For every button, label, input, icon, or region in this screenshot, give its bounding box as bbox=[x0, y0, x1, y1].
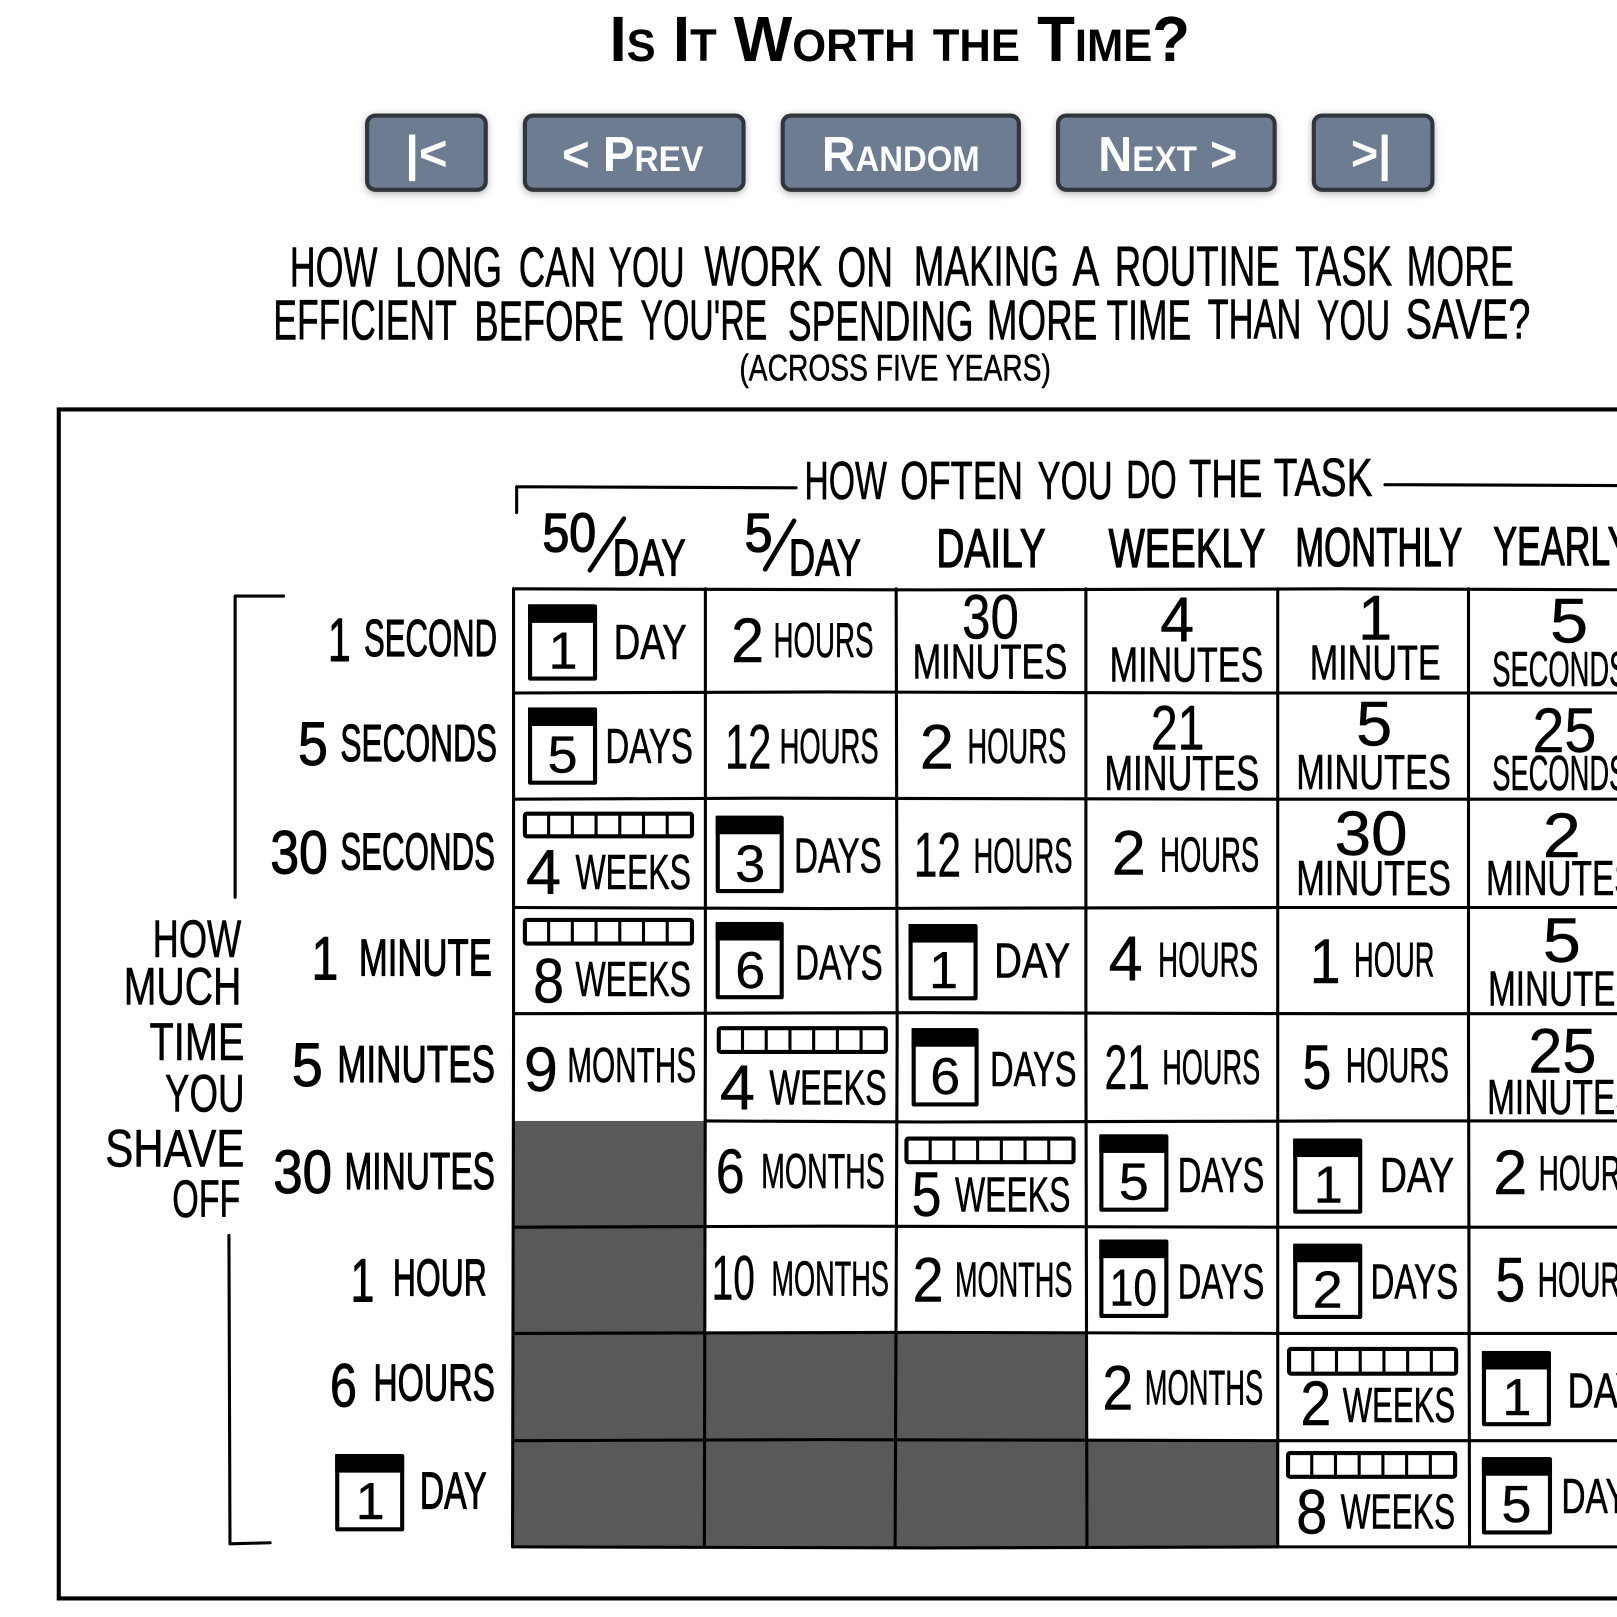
cell: 6 hours, monthly bbox=[1289, 1349, 1456, 1439]
cell: 6 hours, monthly: 2 bbox=[1300, 1369, 1331, 1439]
cell: 1 second, yearly: 5 bbox=[1550, 586, 1588, 656]
question text block: MORE bbox=[987, 289, 1097, 352]
column header: 5/day: 5 bbox=[745, 503, 772, 564]
row label: 5 minutes: MINUTES bbox=[337, 1035, 495, 1093]
cell: 6 hours, yearly bbox=[1482, 1351, 1617, 1426]
cell: 1 minute, 50/day: 8 bbox=[533, 946, 564, 1016]
button: random: Random bbox=[822, 127, 980, 182]
cell: 1 second, 5/day: HOURS bbox=[773, 613, 873, 668]
button: previous bbox=[525, 116, 744, 190]
cell: 5 seconds, 5/day: 12 bbox=[725, 712, 771, 782]
column header: 50/day bbox=[542, 503, 686, 586]
left axis title: TIME bbox=[150, 1013, 244, 1072]
cell: 5 minutes, weekly bbox=[1104, 1033, 1260, 1103]
cell: 30 minutes, yearly: 2 bbox=[1493, 1138, 1527, 1208]
question text block: MORE bbox=[1407, 236, 1514, 299]
column header: 5/day bbox=[745, 503, 861, 586]
cell: 30 seconds, 5/day: 3 bbox=[735, 835, 765, 893]
question text block: A bbox=[1072, 236, 1099, 299]
row label: 1 hour: HOUR bbox=[393, 1248, 487, 1306]
cell: 5 seconds, daily bbox=[920, 712, 1066, 782]
column header: monthly: MONTHLY bbox=[1295, 517, 1462, 578]
cell: 1 hour, daily: 2 bbox=[913, 1245, 944, 1315]
cell: 1 minute, yearly bbox=[1488, 906, 1617, 1016]
button: random bbox=[783, 116, 1019, 190]
button: previous: < Prev bbox=[562, 127, 704, 182]
question text block bbox=[273, 236, 1530, 389]
cell: 1 second, daily: 30 bbox=[962, 582, 1019, 652]
row label: 5 minutes: 5 bbox=[292, 1031, 323, 1099]
cell: 30 seconds, daily bbox=[914, 821, 1072, 891]
cell: 5 seconds, daily: 2 bbox=[920, 712, 954, 782]
question text block: YOU bbox=[608, 237, 685, 300]
cell: 6 hours, yearly: 1 bbox=[1503, 1368, 1531, 1426]
cell: 5 minutes, daily: 6 bbox=[930, 1047, 960, 1105]
cell: 1 minute, 5/day: DAYS bbox=[795, 936, 883, 991]
left axis title: OFF bbox=[172, 1170, 240, 1229]
grid lines bbox=[513, 589, 1617, 1548]
row label: 1 second: 1 bbox=[328, 606, 351, 674]
question text block: WORK bbox=[704, 236, 822, 299]
cell: 6 hours, weekly: 2 bbox=[1102, 1354, 1133, 1424]
cell: 1 second, weekly bbox=[1110, 585, 1263, 693]
cell: 5 seconds, 50/day: DAYS bbox=[605, 719, 693, 774]
cell: 5 seconds, weekly bbox=[1104, 694, 1259, 801]
left axis title: HOW bbox=[153, 910, 242, 969]
cell: 1 second, 5/day: 2 bbox=[731, 606, 764, 676]
row label: 5 minutes bbox=[292, 1031, 495, 1099]
question text block: SPENDING bbox=[788, 290, 974, 353]
cell: 1 day, yearly bbox=[1482, 1457, 1617, 1533]
cell: 1 second, 5/day bbox=[731, 606, 873, 676]
cell: 5 seconds, monthly bbox=[1296, 690, 1451, 800]
row label: 30 minutes: 30 bbox=[273, 1138, 332, 1206]
cell: 1 minute, 50/day: WEEKS bbox=[575, 952, 691, 1007]
left axis title bbox=[105, 910, 244, 1229]
cell: 1 hour, 5/day: MONTHS bbox=[771, 1251, 889, 1306]
cell: 1 minute, monthly bbox=[1310, 927, 1434, 997]
cell: 1 hour, monthly: DAYS bbox=[1371, 1254, 1458, 1309]
cell: 5 minutes, monthly: 5 bbox=[1302, 1033, 1331, 1103]
row label: 1 minute bbox=[311, 925, 492, 993]
cell: 1 second, monthly bbox=[1310, 583, 1441, 691]
cell: 5 minutes, 50/day: MONTHS bbox=[567, 1038, 696, 1093]
column header: 50/day: 50 bbox=[542, 503, 596, 564]
time grid bbox=[105, 448, 1617, 1548]
cell: 1 minute, daily: DAY bbox=[994, 934, 1070, 989]
column header: 5/day: DAY bbox=[789, 528, 861, 586]
top axis title: YOU bbox=[1037, 451, 1113, 511]
cell: 1 day, monthly: 8 bbox=[1296, 1477, 1327, 1547]
cell: 1 day, monthly bbox=[1288, 1453, 1455, 1547]
cell: 30 seconds, yearly: 2 bbox=[1543, 801, 1581, 871]
question text block: THAN bbox=[1208, 288, 1301, 351]
cell: 30 minutes, daily: 5 bbox=[912, 1160, 942, 1230]
row label: 1 day bbox=[335, 1454, 487, 1530]
greyed-out impossible cells bbox=[514, 1121, 1278, 1547]
row label: 1 day: 1 bbox=[356, 1472, 385, 1530]
cell: 1 minute, monthly: HOUR bbox=[1354, 933, 1434, 988]
cell: 30 minutes, daily: WEEKS bbox=[955, 1168, 1070, 1223]
question text block: EFFICIENT bbox=[273, 289, 457, 352]
cell: 1 hour, monthly: 2 bbox=[1313, 1261, 1343, 1319]
cell: 5 minutes, 5/day: 4 bbox=[720, 1054, 755, 1124]
top axis title bbox=[804, 448, 1373, 511]
title: Is It Worth the Time? bbox=[609, 3, 1190, 75]
cell: 30 minutes, weekly: DAYS bbox=[1178, 1148, 1264, 1203]
cell: 5 seconds, 5/day bbox=[725, 712, 879, 782]
cell: 1 hour, monthly bbox=[1293, 1244, 1458, 1319]
cell: 30 minutes, 5/day bbox=[716, 1137, 885, 1207]
button: next bbox=[1058, 116, 1275, 190]
row label: 1 second: SECOND bbox=[364, 609, 497, 667]
cell: 1 minute, monthly: 1 bbox=[1310, 927, 1341, 997]
cell: 30 seconds, 50/day: WEEKS bbox=[575, 845, 691, 900]
cell: 30 seconds, weekly: HOURS bbox=[1160, 827, 1259, 882]
cell: 1 hour, 5/day bbox=[712, 1243, 889, 1313]
cell: 1 hour, yearly bbox=[1495, 1245, 1617, 1315]
row label: 6 hours bbox=[330, 1352, 495, 1420]
question text block: TIME bbox=[1107, 289, 1191, 352]
cell: 6 hours, monthly: WEEKS bbox=[1343, 1378, 1455, 1433]
row label: 30 minutes: MINUTES bbox=[344, 1142, 495, 1200]
row label: 1 second bbox=[328, 606, 497, 674]
top axis title: TASK bbox=[1274, 448, 1373, 508]
cell: 1 second, weekly: MINUTES bbox=[1110, 638, 1263, 693]
cell: 5 minutes, weekly: HOURS bbox=[1162, 1040, 1260, 1095]
cell: 5 minutes, yearly: 25 bbox=[1528, 1017, 1596, 1087]
cell: 1 second, 50/day bbox=[528, 604, 687, 679]
cell: 1 minute, weekly: 4 bbox=[1109, 925, 1143, 995]
cell: 1 hour, 5/day: 10 bbox=[712, 1243, 755, 1313]
cell: 5 seconds, daily: HOURS bbox=[967, 719, 1066, 774]
question text block: LONG bbox=[395, 237, 502, 300]
cell: 1 minute, 5/day: 6 bbox=[735, 941, 765, 999]
cell: 1 second, 50/day: DAY bbox=[614, 615, 687, 670]
cell: 30 minutes, daily bbox=[906, 1138, 1074, 1230]
row label: 5 seconds: SECONDS bbox=[340, 714, 497, 772]
row label: 1 minute: MINUTE bbox=[359, 929, 492, 987]
cell: 5 seconds, monthly: 5 bbox=[1356, 690, 1392, 760]
cell: 1 second, daily: MINUTES bbox=[913, 635, 1067, 690]
button: next: Next > bbox=[1098, 127, 1238, 182]
cell: 5 minutes, monthly: HOURS bbox=[1346, 1038, 1449, 1093]
cell: 5 minutes, 50/day bbox=[524, 1035, 696, 1105]
left axis bracket bbox=[229, 596, 284, 1544]
cell: 6 hours, weekly bbox=[1102, 1354, 1263, 1424]
cell: 5 minutes, 5/day: WEEKS bbox=[769, 1060, 887, 1115]
cell: 1 minute, daily: 1 bbox=[929, 941, 958, 999]
top axis bracket bbox=[517, 485, 1617, 513]
question text block: TASK bbox=[1295, 236, 1392, 299]
row label: 5 seconds: 5 bbox=[298, 710, 328, 778]
cell: 5 minutes, monthly bbox=[1302, 1033, 1449, 1103]
row label: 5 seconds bbox=[298, 710, 497, 778]
cell: 5 minutes, weekly: 21 bbox=[1104, 1033, 1150, 1103]
question text block: YOU bbox=[1317, 289, 1390, 352]
cell: 30 seconds, 5/day bbox=[716, 816, 882, 893]
cell: 6 hours, weekly: MONTHS bbox=[1145, 1361, 1263, 1416]
cell: 1 hour, weekly: DAYS bbox=[1178, 1254, 1264, 1309]
cell: 1 minute, daily bbox=[909, 924, 1070, 999]
cell: 30 seconds, weekly bbox=[1112, 819, 1259, 889]
question text block: (ACROSS FIVE YEARS) bbox=[739, 347, 1051, 389]
cell: 5 minutes, 5/day bbox=[719, 1028, 887, 1124]
cell: 30 seconds, yearly bbox=[1486, 801, 1617, 906]
top axis title: OFTEN bbox=[900, 451, 1023, 511]
left axis title: SHAVE bbox=[105, 1119, 244, 1178]
question text block: CAN bbox=[519, 237, 596, 300]
cell: 30 seconds, 5/day: DAYS bbox=[794, 828, 882, 883]
cell: 30 minutes, monthly bbox=[1293, 1138, 1454, 1213]
row label: 1 hour bbox=[351, 1246, 487, 1314]
button: last bbox=[1314, 116, 1432, 190]
top axis title: THE bbox=[1189, 449, 1262, 509]
row label: 6 hours: HOURS bbox=[373, 1353, 495, 1411]
cell: 30 minutes, monthly: DAY bbox=[1380, 1148, 1454, 1203]
cell: 30 minutes, weekly: 5 bbox=[1119, 1152, 1149, 1210]
cell: 30 seconds, monthly: MINUTES bbox=[1296, 851, 1451, 906]
cell: 5 minutes, 50/day: 9 bbox=[524, 1035, 558, 1105]
cell: 1 minute, weekly bbox=[1109, 925, 1258, 995]
cell: 1 minute, 5/day bbox=[716, 922, 883, 999]
row label: 1 day: DAY bbox=[420, 1462, 487, 1520]
cell: 1 second, weekly: 4 bbox=[1160, 585, 1194, 655]
cell: 1 hour, weekly: 10 bbox=[1110, 1259, 1157, 1317]
row label: 30 minutes bbox=[273, 1138, 495, 1206]
cell: 1 hour, daily bbox=[913, 1245, 1072, 1315]
column header: weekly: WEEKLY bbox=[1109, 518, 1265, 579]
cell: 5 minutes, yearly bbox=[1487, 1017, 1617, 1125]
cell: 1 minute, yearly: 5 bbox=[1543, 906, 1581, 976]
left axis title: MUCH bbox=[124, 957, 241, 1016]
cell: 5 minutes, daily bbox=[912, 1028, 1077, 1105]
top axis title: DO bbox=[1126, 450, 1177, 510]
question text block: BEFORE bbox=[474, 290, 624, 353]
cell: 1 second, monthly: 1 bbox=[1358, 583, 1392, 653]
top axis title: HOW bbox=[804, 451, 887, 511]
cell: 30 seconds, daily: HOURS bbox=[974, 828, 1072, 883]
question text block: ON bbox=[837, 237, 893, 300]
cell: 5 seconds, 50/day: 5 bbox=[548, 725, 578, 783]
cell: 5 seconds, weekly: 21 bbox=[1151, 694, 1204, 764]
cell: 1 second, monthly: MINUTE bbox=[1310, 636, 1441, 691]
cell: 1 hour, daily: MONTHS bbox=[955, 1252, 1072, 1307]
button: first bbox=[367, 116, 486, 190]
cell: 1 minute, weekly: HOURS bbox=[1158, 933, 1258, 988]
cell: 30 seconds, monthly bbox=[1296, 799, 1451, 906]
cell: 30 minutes, monthly: 1 bbox=[1314, 1155, 1343, 1213]
cell: 30 seconds, daily: 12 bbox=[914, 821, 961, 891]
cell: 5 seconds, yearly bbox=[1492, 696, 1617, 801]
row label: 30 seconds: 30 bbox=[270, 818, 328, 886]
button: first: |< bbox=[405, 126, 448, 182]
cell: 30 seconds, weekly: 2 bbox=[1112, 819, 1146, 889]
column header: daily: DAILY bbox=[936, 518, 1046, 579]
question text block: ROUTINE bbox=[1115, 236, 1280, 299]
chart frame bbox=[59, 409, 1617, 1598]
button: last: >| bbox=[1351, 126, 1391, 182]
cell: 30 minutes, 5/day: 6 bbox=[716, 1137, 745, 1207]
cell: 5 seconds, yearly: 25 bbox=[1532, 696, 1596, 766]
cell: 5 minutes, daily: DAYS bbox=[990, 1042, 1077, 1097]
cell: 5 seconds, 50/day bbox=[528, 707, 693, 783]
question text block: MAKING bbox=[914, 236, 1059, 299]
cell: 1 second, 50/day: 1 bbox=[549, 621, 578, 679]
cell: 1 day, monthly: WEEKS bbox=[1341, 1484, 1455, 1539]
question text block: YOU'RE bbox=[640, 289, 767, 352]
cell: 30 seconds, 50/day bbox=[525, 814, 692, 908]
row label: 30 seconds: SECONDS bbox=[340, 822, 495, 880]
cell: 5 seconds, monthly: MINUTES bbox=[1296, 745, 1451, 800]
cell: 5 seconds, 5/day: HOURS bbox=[780, 719, 879, 774]
row label: 1 minute: 1 bbox=[311, 925, 338, 993]
row label: 1 hour: 1 bbox=[351, 1246, 374, 1314]
cell: 1 second, yearly bbox=[1492, 586, 1617, 697]
question text block: HOW bbox=[290, 237, 378, 300]
cell: 30 minutes, 5/day: MONTHS bbox=[761, 1144, 885, 1199]
cell: 1 minute, 50/day bbox=[525, 920, 692, 1016]
row label: 30 seconds bbox=[270, 818, 495, 886]
cell: 5 seconds, weekly: MINUTES bbox=[1104, 746, 1259, 801]
cell: 1 hour, yearly: 5 bbox=[1495, 1245, 1525, 1315]
cell: 1 second, daily bbox=[913, 582, 1067, 690]
cell: 1 hour, weekly bbox=[1099, 1240, 1264, 1317]
column header: 50/day: DAY bbox=[613, 528, 686, 586]
cell: 30 seconds, 50/day: 4 bbox=[526, 838, 561, 908]
cell: 30 minutes, yearly bbox=[1493, 1138, 1617, 1208]
question text block: SAVE? bbox=[1406, 288, 1530, 351]
row label: 6 hours: 6 bbox=[330, 1352, 357, 1420]
cell: 30 minutes, weekly bbox=[1099, 1134, 1264, 1210]
navigation buttons bbox=[367, 116, 1432, 190]
cell: 30 seconds, monthly: 30 bbox=[1334, 799, 1408, 869]
cell: 1 day, yearly: 5 bbox=[1502, 1475, 1531, 1533]
left axis title: YOU bbox=[165, 1065, 244, 1124]
